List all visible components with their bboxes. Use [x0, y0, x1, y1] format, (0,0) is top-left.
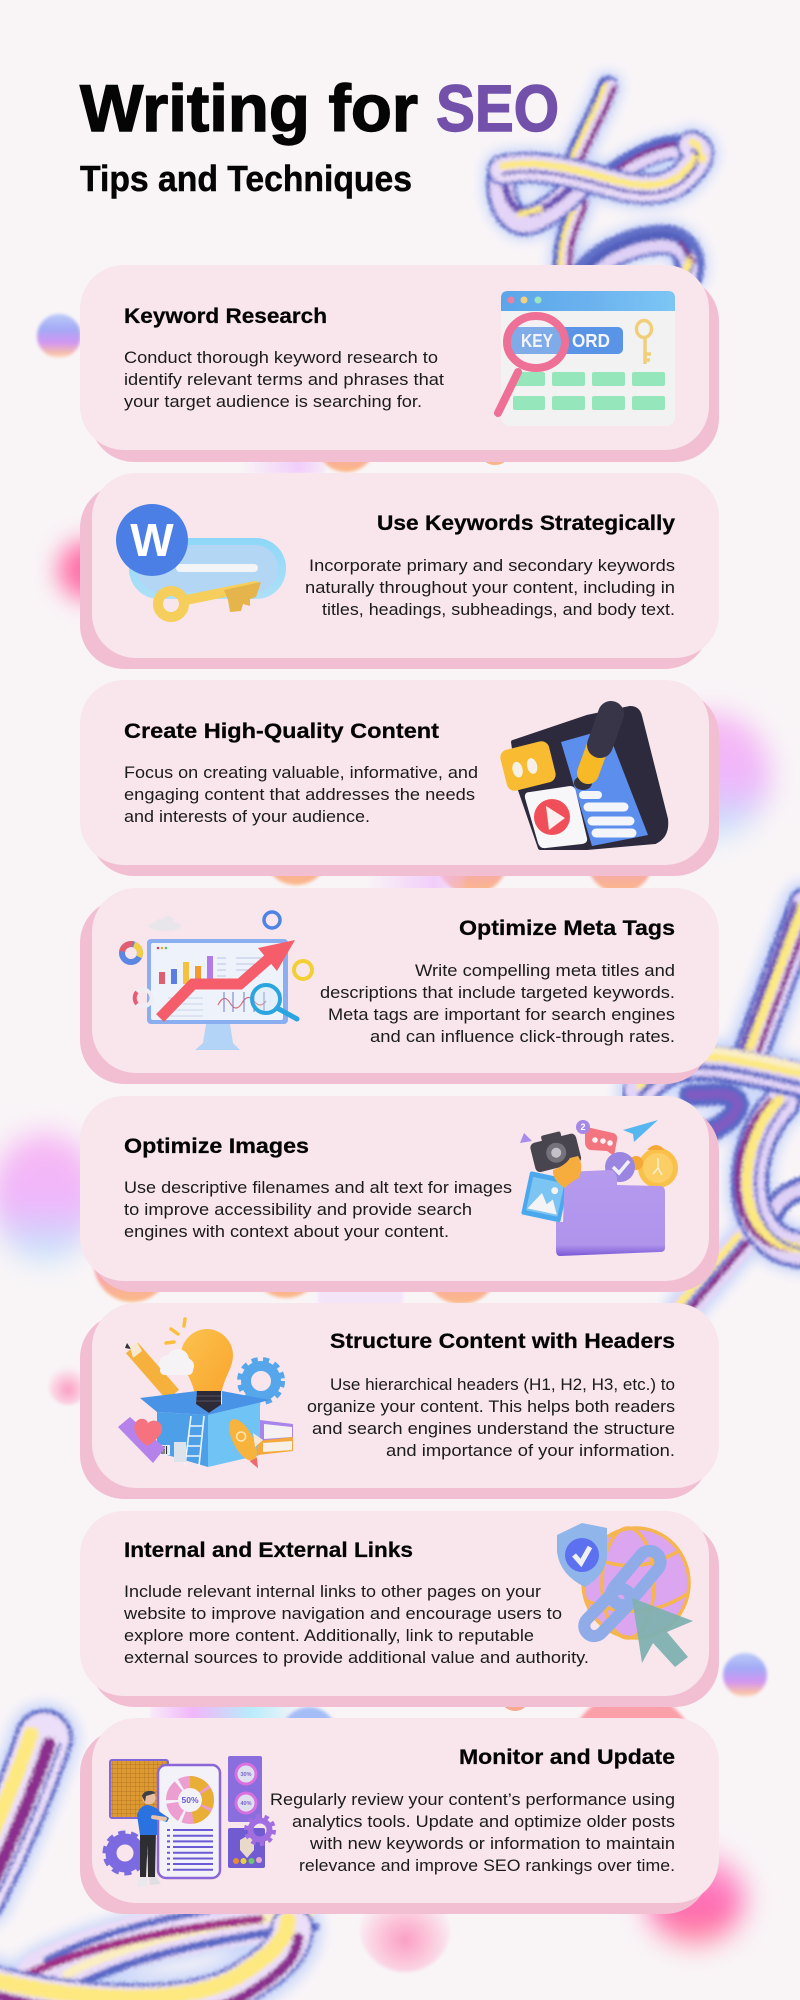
subtitle: Tips and Techniques [80, 158, 412, 199]
icon: person with analytics dashboard and gears: 40% [240, 1801, 252, 1807]
text: optimize meta tags: Meta tags are important for search engines [328, 1006, 675, 1024]
text: monitor and update [270, 1791, 675, 1875]
text: use keywords strategically [305, 557, 675, 619]
heading: keyword research: Keyword Research [124, 305, 327, 328]
text: keyword research [124, 349, 444, 411]
text: keyword research: Conduct thorough keyword research to [124, 349, 438, 367]
text: monitor and update: with new keywords or information to maintain [309, 1835, 675, 1853]
text: use keywords strategically: Incorporate primary and secondary keywords [309, 557, 675, 575]
text: internal and external links: external sources to provide additional value and authority. [124, 1649, 589, 1667]
text: optimize images [124, 1179, 512, 1241]
heading: optimize meta tags: Optimize Meta Tags [459, 917, 675, 940]
text: create high-quality content: and interests of your audience. [124, 808, 370, 826]
text: optimize images: to improve accessibility and provide search [124, 1201, 472, 1219]
text: monitor and update: Regularly review your content’s performance using [270, 1791, 675, 1809]
text: structure content with headers: organize your content. This helps both readers [307, 1398, 675, 1416]
icon: person with analytics dashboard and gears [105, 1756, 274, 1887]
text: structure content with headers: Use hierarchical headers (H1, H2, H3, etc.) to [330, 1376, 675, 1394]
panel: structure content with headers [80, 1303, 719, 1499]
text: keyword research: your target audience is searching for. [124, 393, 422, 411]
text: optimize meta tags: and can influence click-through rates. [370, 1028, 675, 1046]
text: optimize images: Use descriptive filenames and alt text for images [124, 1179, 512, 1197]
panel: use keywords strategically [80, 473, 719, 669]
panel: optimize images [80, 1096, 719, 1292]
squiggle ribbon: top right [501, 85, 707, 282]
text: optimize meta tags: descriptions that include targeted keywords. [320, 984, 675, 1002]
icon: person with analytics dashboard and gears: 50% [181, 1795, 199, 1805]
title: SEO [436, 71, 559, 145]
icon: analytics monitor with rising arrow [119, 912, 312, 1050]
heading: internal and external links: Internal and External Links [124, 1539, 413, 1562]
icon: open box with lightbulb, pencil, gear and rocket [118, 1319, 293, 1473]
heading: structure content with headers: Structure Content with Headers [330, 1330, 675, 1353]
panel: create high-quality content [80, 680, 719, 876]
text: internal and external links [123, 1583, 589, 1667]
icon: person with analytics dashboard and gears: 30% [240, 1772, 252, 1778]
text: optimize meta tags: Write compelling meta titles and [415, 962, 675, 980]
text: structure content with headers: and importance of your information. [386, 1442, 675, 1460]
icon: folder with camera, bell, clock and messages [520, 1120, 678, 1256]
text: internal and external links: website to improve navigation and encourage users to [123, 1605, 562, 1623]
panel: keyword research [80, 265, 719, 462]
text: monitor and update: relevance and improve SEO rankings over time. [299, 1857, 675, 1875]
text: use keywords strategically: titles, headings, subheadings, and body text. [322, 601, 675, 619]
text: use keywords strategically: naturally throughout your content, including in [305, 579, 675, 597]
heading: create high-quality content: Create High-Quality Content [124, 720, 439, 743]
heading: monitor and update: Monitor and Update [459, 1746, 675, 1769]
icon: folder with camera, bell, clock and messages: 2 [580, 1122, 586, 1132]
panel: internal and external links [80, 1511, 719, 1707]
squiggle ribbon: bottom left [0, 1734, 315, 2000]
text: internal and external links: explore more content. Additionally, link to reputable [124, 1627, 534, 1645]
text: monitor and update: analytics tools. Update and optimize older posts [292, 1813, 675, 1831]
icon: W badge and golden key [116, 504, 286, 617]
text: optimize meta tags [320, 962, 675, 1046]
icon: keyword browser window with magnifier [498, 291, 675, 426]
text: keyword research: identify relevant terms and phrases that [124, 371, 444, 389]
title: Writing for [80, 71, 418, 145]
decorative blurred blobs and spheres [0, 314, 770, 1972]
heading: use keywords strategically: Use Keywords Strategically [377, 512, 675, 535]
panel: optimize meta tags [80, 888, 719, 1084]
heading: optimize images: Optimize Images [124, 1135, 309, 1158]
title [80, 71, 559, 145]
icon: W badge and golden key: W [130, 514, 174, 566]
icon: keyword browser window with magnifier: ORD [572, 331, 610, 351]
text: create high-quality content: engaging content that addresses the needs [124, 786, 475, 804]
text: structure content with headers [307, 1376, 675, 1460]
text: structure content with headers: and search engines understand the structure [312, 1420, 675, 1438]
text: internal and external links: Include relevant internal links to other pages on your [124, 1583, 542, 1601]
text: create high-quality content: Focus on creating valuable, informative, and [124, 764, 478, 782]
text: create high-quality content [124, 764, 478, 826]
icon: keyword browser window with magnifier: KEY [521, 331, 553, 351]
text: optimize images: engines with context about your content. [124, 1223, 449, 1241]
panel: monitor and update [80, 1718, 719, 1914]
squiggle ribbon: right side [640, 905, 800, 1315]
icon: content panel with marker and play button [499, 708, 666, 848]
icon: globe with chain link, shield and cursor [557, 1523, 693, 1667]
